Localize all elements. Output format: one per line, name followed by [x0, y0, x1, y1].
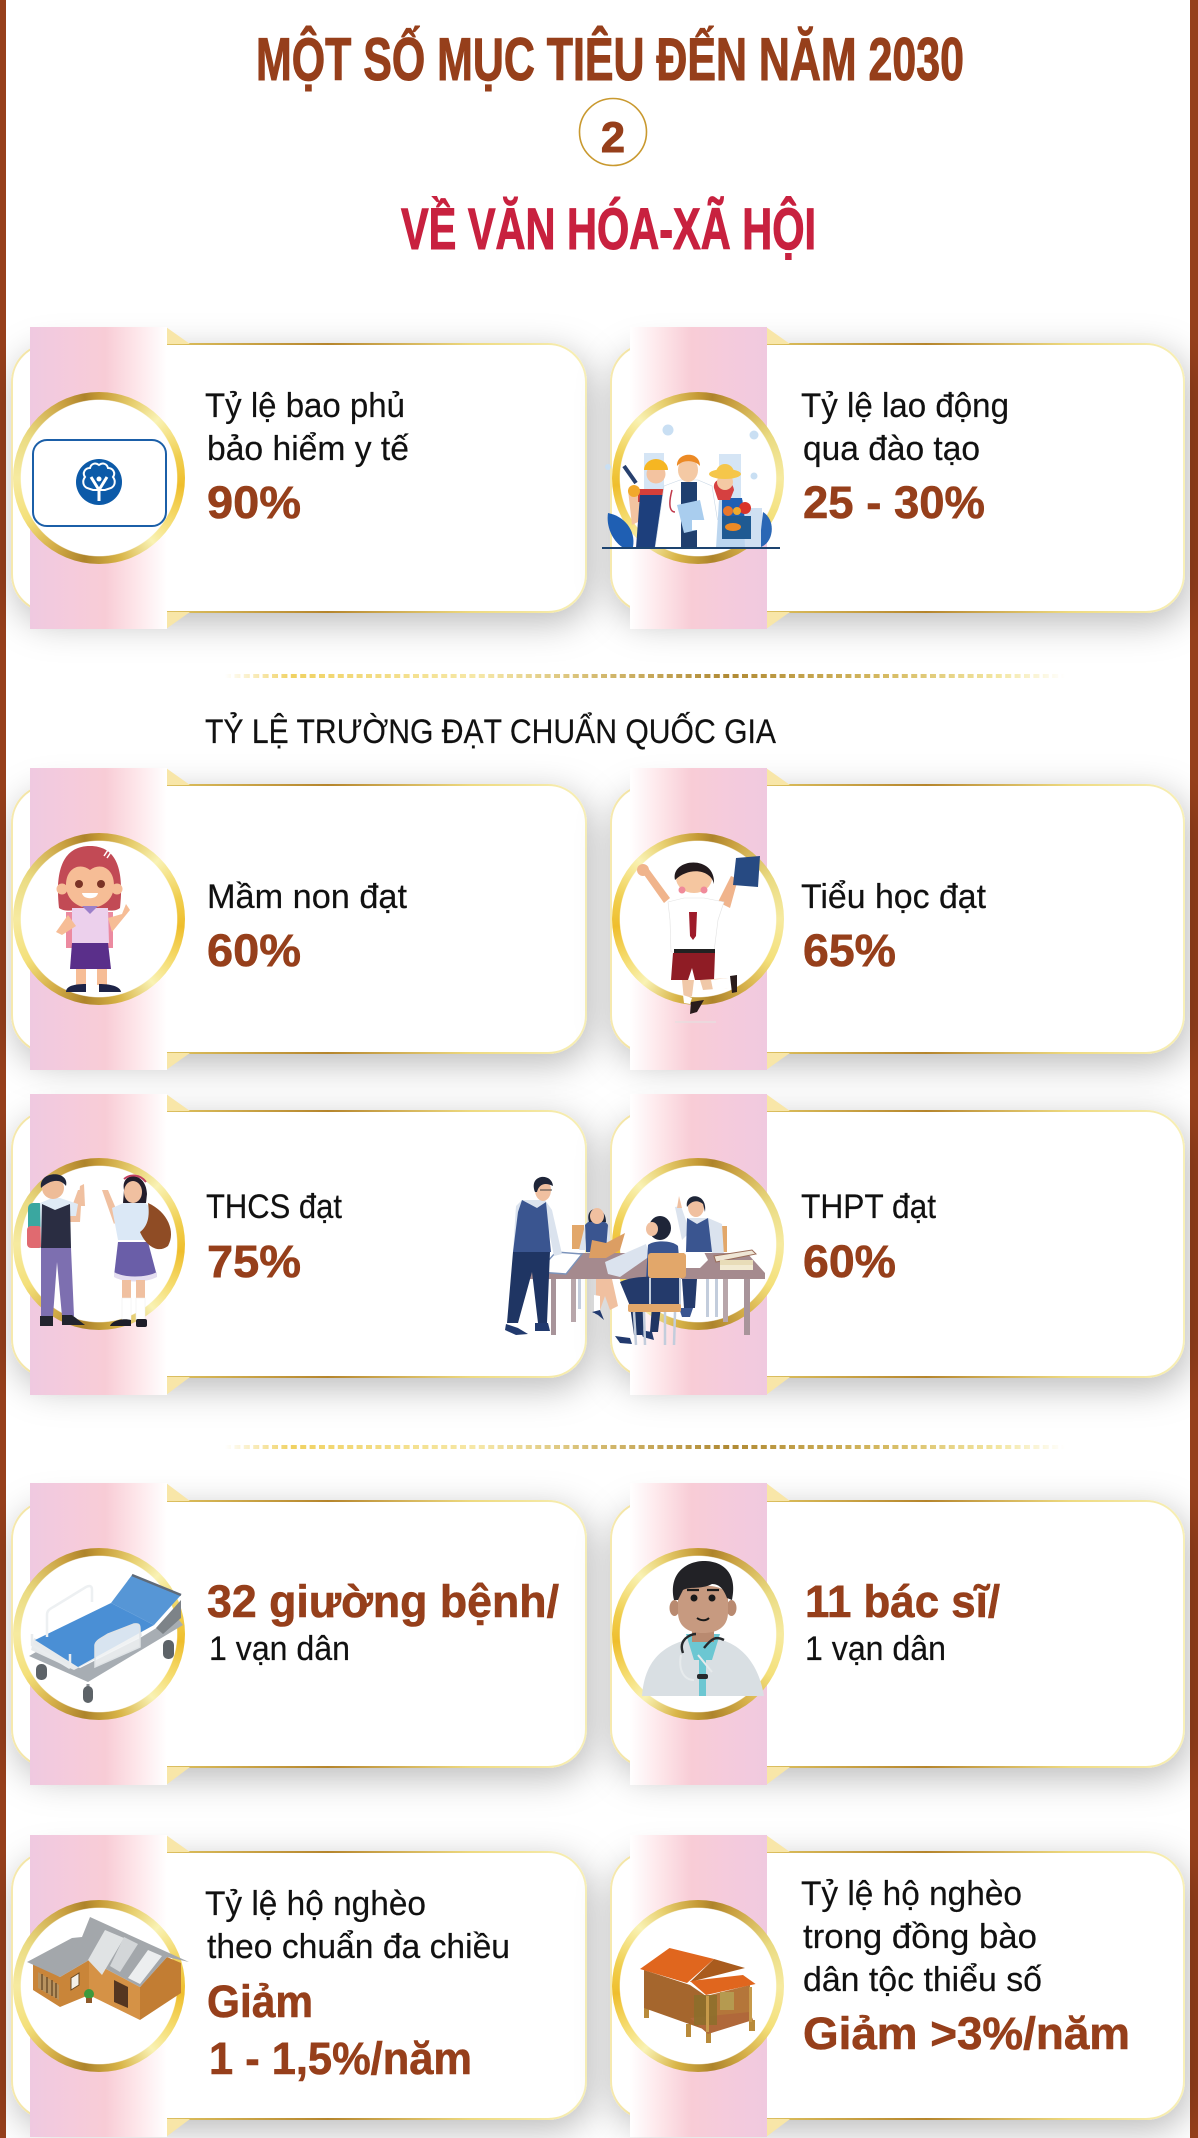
- text: primary school: 65%: [803, 925, 896, 976]
- text: doctors: 1 vạn dân: [805, 1630, 946, 1668]
- illustration: mud house: [27, 1917, 189, 2020]
- illustration: hospital bed: [29, 1575, 183, 1703]
- text: kindergarten: Mầm non đạt: [207, 878, 408, 916]
- text: lower secondary: 75%: [207, 1236, 301, 1287]
- text: kindergarten: [207, 878, 408, 976]
- text: trained labour: Tỷ lệ lao động: [801, 387, 1009, 425]
- text: hospital beds: [207, 1576, 559, 1668]
- text: ethnic minority poverty rate: Giảm >3%/năm: [803, 2008, 1130, 2059]
- number badge: [580, 98, 646, 166]
- left border bar: [0, 0, 6, 2138]
- text: doctors: [805, 1576, 1000, 1668]
- text: hospital beds: 32 giường bệnh/: [207, 1576, 559, 1627]
- text: trained labour: 25 - 30%: [803, 477, 985, 528]
- text: ethnic minority poverty rate: [801, 1875, 1130, 2059]
- panel: ethnic minority poverty rate: [595, 1835, 1198, 2138]
- illustration: doctor: [642, 1561, 764, 1696]
- text: health insurance: Tỷ lệ bao phủ: [205, 387, 405, 425]
- text: ethnic minority poverty rate: Tỷ lệ hộ nghèo: [801, 1875, 1022, 1913]
- icon: insurance card: [33, 440, 166, 526]
- text: doctors: 11 bác sĩ/: [805, 1576, 1000, 1627]
- text: lower secondary: THCS đạt: [206, 1188, 343, 1226]
- text: multidimensional poverty rate: [205, 1885, 510, 2084]
- right border bar: [1190, 0, 1198, 2138]
- text: hospital beds: 1 vạn dân: [209, 1630, 350, 1668]
- illustration: stilt house: [640, 1948, 756, 2043]
- panel: lower secondary: [0, 1094, 610, 1408]
- panel: upper secondary: [505, 1094, 1198, 1408]
- text: multidimensional poverty rate: Giảm: [207, 1976, 313, 2027]
- text: upper secondary: [801, 1188, 937, 1287]
- illustration: classroom group at table: [505, 1177, 765, 1345]
- panel: primary school: [595, 768, 1198, 1084]
- header: title block: [256, 26, 964, 262]
- text: kindergarten: 60%: [207, 925, 301, 976]
- text: primary school: Tiểu học đạt: [801, 878, 987, 916]
- text: ethnic minority poverty rate: trong đồng bào: [803, 1918, 1037, 1956]
- panel: kindergarten: [0, 768, 610, 1084]
- divider: dotted line 2: [228, 1445, 1058, 1449]
- subtitle: VỀ VĂN HÓA-XÃ HỘI: [401, 197, 816, 262]
- text: multidimensional poverty rate: 1 - 1,5%/năm: [209, 2033, 472, 2084]
- text: ethnic minority poverty rate: dân tộc thiểu số: [803, 1961, 1042, 1999]
- panel: health insurance coverage: [0, 327, 610, 644]
- panel: doctors: [595, 1483, 1198, 1798]
- divider: dotted line 1: [228, 674, 1058, 678]
- number badge: 2: [601, 114, 625, 162]
- text: trained labour: qua đào tạo: [803, 430, 980, 468]
- text: multidimensional poverty rate: theo chuẩn đa chiều: [207, 1928, 510, 1966]
- text: lower secondary: [206, 1188, 343, 1287]
- illustration: little girl: [56, 846, 130, 992]
- text: trained labour: [801, 387, 1009, 528]
- text: health insurance: [205, 387, 409, 528]
- illustration: workers: [602, 424, 780, 548]
- panel: multidimensional poverty rate: [0, 1835, 610, 2138]
- illustration: jumping boy: [637, 856, 760, 1022]
- text: upper secondary: 60%: [803, 1236, 896, 1287]
- text: multidimensional poverty rate: Tỷ lệ hộ nghèo: [205, 1885, 426, 1923]
- panel: hospital beds: [0, 1483, 610, 1798]
- illustration: two students: [27, 1174, 171, 1327]
- text: primary school: [801, 878, 987, 976]
- panel: trained labour: [595, 327, 1198, 644]
- text: health insurance: 90%: [207, 477, 301, 528]
- text: upper secondary: THPT đạt: [801, 1188, 937, 1226]
- text: health insurance: bảo hiểm y tế: [207, 430, 409, 468]
